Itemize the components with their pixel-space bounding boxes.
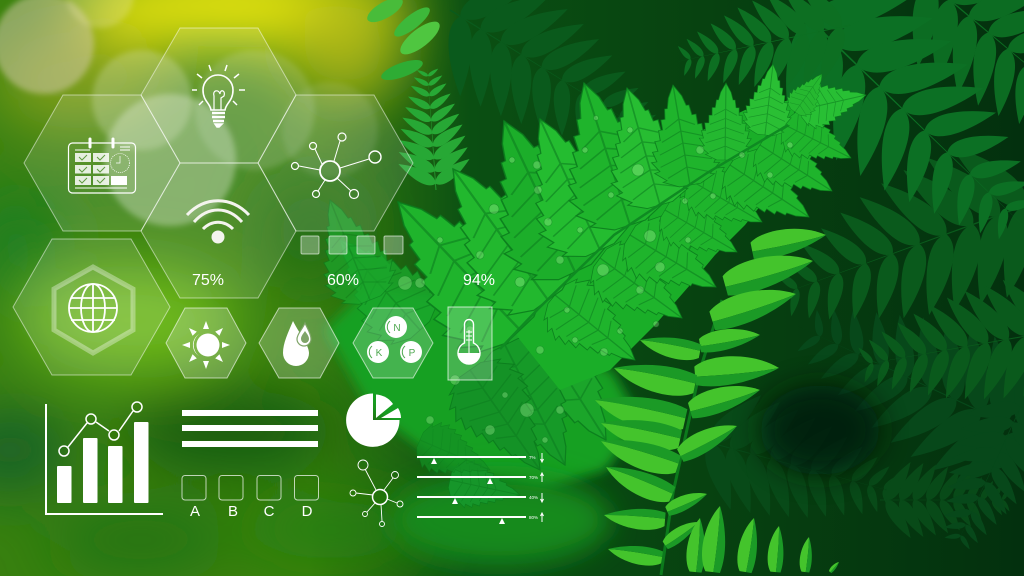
icon: water drops <box>283 321 311 366</box>
lower soft green fern haze <box>390 475 610 565</box>
main fern solid body <box>470 100 810 390</box>
text placeholder lines <box>182 410 318 447</box>
hexagon panel: wifi with 75% <box>141 163 296 298</box>
icon: K nutrient: K <box>376 348 383 359</box>
hexagon: water <box>259 308 339 378</box>
hexagon: sun <box>166 308 246 378</box>
icon: P nutrient: P <box>409 348 416 359</box>
option boxes A B C D: D <box>302 503 313 520</box>
upper left small fern <box>364 0 475 193</box>
main fern frond <box>355 61 871 390</box>
inner hexagon ring <box>54 267 133 353</box>
lime narrow-leaf fern <box>591 221 828 575</box>
icon: wifi <box>187 201 249 244</box>
icon: lightbulb <box>192 65 245 127</box>
lower body of main fern glow <box>325 285 640 490</box>
dark shadow pocket between fronds <box>760 385 880 475</box>
slider list <box>417 453 544 524</box>
water droplets on fern <box>398 116 793 443</box>
icon: globe <box>69 284 117 332</box>
lower fern at bottom edge <box>685 504 841 573</box>
chart axes <box>46 404 163 514</box>
chart bars <box>57 422 148 503</box>
slider 7%: 7% <box>529 455 536 460</box>
value: 60%: 60% <box>327 272 359 289</box>
option boxes A B C D <box>182 476 318 520</box>
icon: N nutrient: N <box>393 323 401 334</box>
hexagon panel: network <box>258 95 413 231</box>
value: 94%: 94% <box>463 272 495 289</box>
slider 80%: 80% <box>529 515 538 520</box>
option boxes A B C D: B <box>228 503 238 520</box>
option boxes A B C D: A <box>190 503 200 520</box>
status squares with 60% <box>301 236 403 289</box>
slider 70%: 70% <box>529 475 538 480</box>
panel: thermometer <box>448 307 492 380</box>
chart trend line <box>59 402 142 456</box>
hexagon: nutrients N K P <box>353 308 433 378</box>
secondary ferns left of the main frond <box>296 186 646 519</box>
value: 75%: 75% <box>192 272 224 289</box>
slider 40%: 40% <box>529 495 538 500</box>
icon: sun <box>182 321 230 369</box>
option boxes A B C D: C <box>264 503 275 520</box>
small network diagram <box>350 460 403 526</box>
dark fern fronds in the background <box>411 0 1024 571</box>
pie chart <box>346 393 401 447</box>
hexagon panel: lightbulb <box>141 28 296 163</box>
hexagon panel: globe <box>13 239 170 375</box>
hexagon panel: calendar <box>24 95 180 231</box>
bar and line chart <box>46 402 163 514</box>
decorative bokeh light circles <box>0 0 378 226</box>
icon: thermometer <box>458 320 480 364</box>
icon: calendar with clock <box>68 139 136 193</box>
icon: network nodes <box>292 133 381 198</box>
